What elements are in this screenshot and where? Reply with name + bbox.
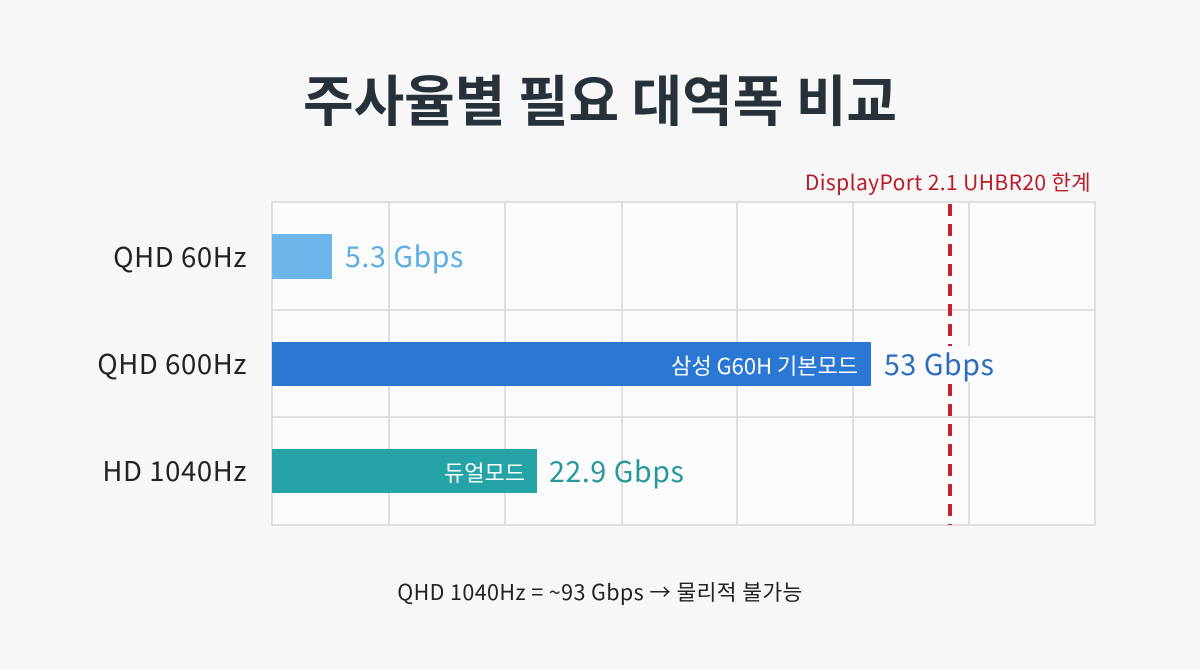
bar: HD 1040Hz: 듀얼모드 — [444, 456, 525, 488]
y labels: HD 1040Hz — [102, 449, 247, 489]
bar: HD 1040Hz: 22.9 Gbps — [549, 450, 684, 491]
bar: QHD 60Hz — [272, 234, 464, 279]
y labels — [97, 235, 247, 489]
footer note: QHD 1040Hz = ~93 Gbps → 물리적 불가능 — [397, 576, 803, 607]
chart — [97, 167, 1095, 525]
bar: QHD 60Hz: 5.3 Gbps — [345, 235, 464, 276]
bar: HD 1040Hz — [272, 449, 684, 493]
bar: QHD 600Hz: 삼성 G60H 기본모드 — [671, 349, 858, 381]
bar: QHD 600Hz: 53 Gbps — [884, 343, 994, 384]
limit line: DisplayPort 2.1: DisplayPort 2.1 UHBR20 한계 — [805, 167, 1091, 197]
title: 주사율별 필요 대역폭 비교 — [303, 57, 897, 137]
bar: QHD 600Hz — [272, 342, 1001, 386]
y labels: QHD 600Hz — [97, 342, 247, 382]
y labels: QHD 60Hz — [113, 235, 247, 275]
